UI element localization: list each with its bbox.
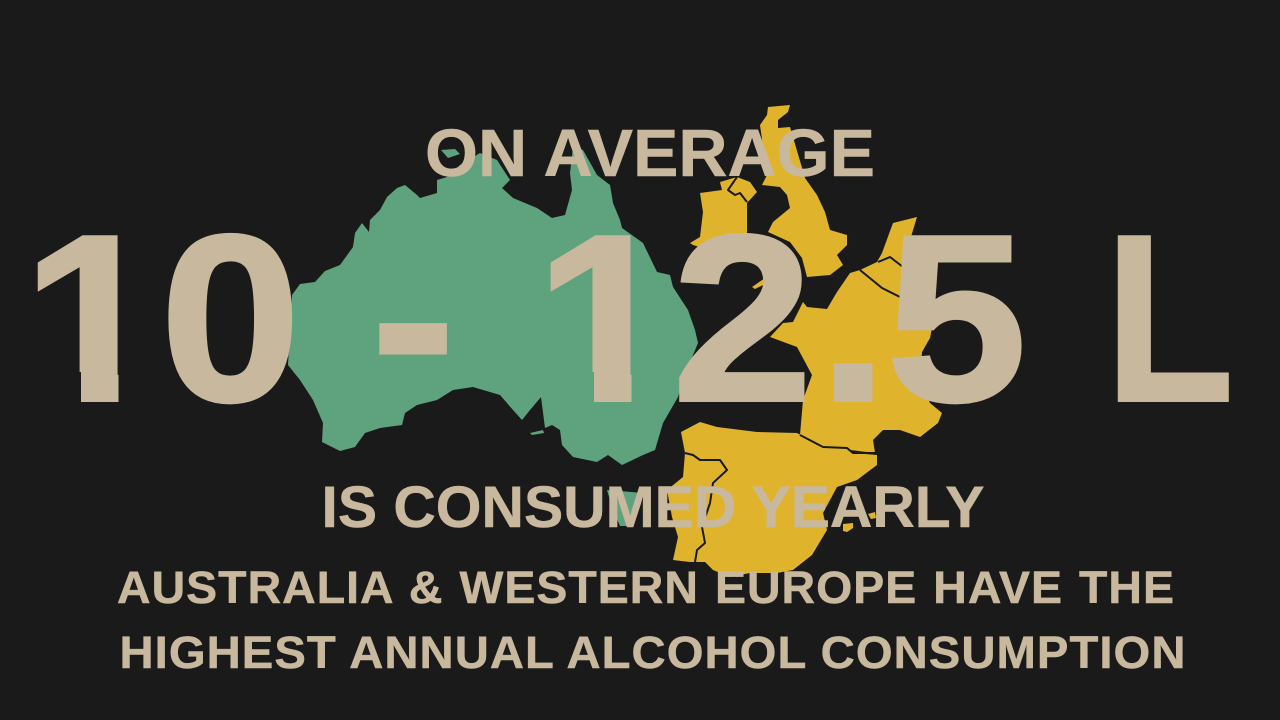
- map: Western Europe: [667, 105, 942, 577]
- Ireland: [690, 177, 757, 252]
- island: Mallorca: [843, 523, 853, 532]
- island: Tiwi: [441, 149, 460, 158]
- island: Kangaroo: [530, 430, 544, 435]
- country borders: [685, 177, 907, 562]
- infographic canvas: [38, 105, 1229, 669]
- map: Australia: [288, 147, 698, 526]
- France and Benelux: [770, 217, 942, 453]
- Iberia: [667, 422, 877, 577]
- big number: 10 - 12.5 L: [38, 232, 1229, 404]
- caption line 1: AUSTRALIA & WESTERN EUROPE HAVE THE: [117, 562, 1175, 613]
- heading: on average: ON AVERAGE: [425, 116, 875, 191]
- big number: 10 - 12.5 L: L: [1105, 185, 1234, 451]
- island: Tasmania: [607, 490, 643, 526]
- caption line 2: HIGHEST ANNUAL ALCOHOL CONSUMPTION: [120, 627, 1186, 678]
- Great Britain: [760, 105, 847, 277]
- island: Menorca: [868, 512, 876, 519]
- big number: 10 - 12.5 L: 10 - 12.5: [22, 186, 1027, 452]
- subheading: is consumed yearly: IS CONSUMED YEARLY: [322, 475, 984, 540]
- Cornwall: [752, 278, 765, 289]
